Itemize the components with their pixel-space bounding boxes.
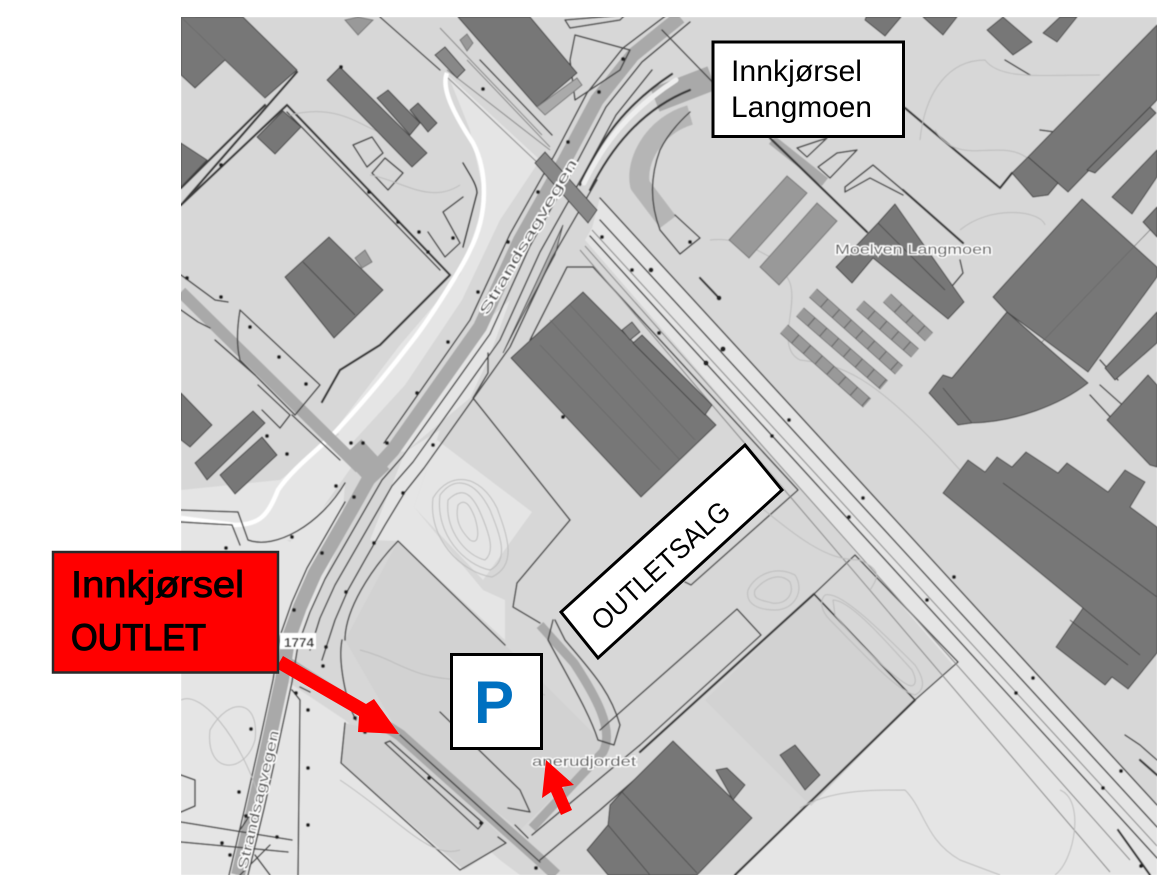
label: parking P <box>452 654 542 748</box>
map label: anerudjordet: anerudjordet <box>532 753 636 769</box>
road number 1774: 1774 <box>284 635 315 650</box>
light terrain <box>181 75 1157 875</box>
label: Innkjørsel Langmoen <box>713 42 904 136</box>
label: Innkjørsel Langmoen: Innkjørsel <box>731 55 862 88</box>
label: Innkjørsel OUTLET: Innkjørsel <box>71 564 244 605</box>
contours <box>181 60 1100 875</box>
corridor lines <box>380 17 1157 872</box>
label: Innkjørsel OUTLET <box>53 552 278 672</box>
white stream <box>181 73 484 525</box>
label: parking P: P <box>474 669 514 736</box>
label: Innkjørsel Langmoen: Langmoen <box>731 91 872 124</box>
arrow: to outlet entrance <box>276 656 399 734</box>
gray roads <box>238 17 680 875</box>
map label: Strandsagvegen upper: Strandsagvegen <box>476 156 580 318</box>
map label: Strandsagvegen lower: Strandsagvegen <box>234 729 282 871</box>
label: OUTLETSALG <box>561 445 782 658</box>
label: OUTLETSALG: OUTLETSALG <box>585 495 736 636</box>
label: Innkjørsel OUTLET: OUTLET <box>71 617 206 658</box>
arrow: to parking <box>542 760 574 815</box>
darker plots <box>342 724 864 870</box>
map label: Moelven Langmoen: Moelven Langmoen <box>835 241 992 257</box>
utility dots <box>185 57 1143 870</box>
